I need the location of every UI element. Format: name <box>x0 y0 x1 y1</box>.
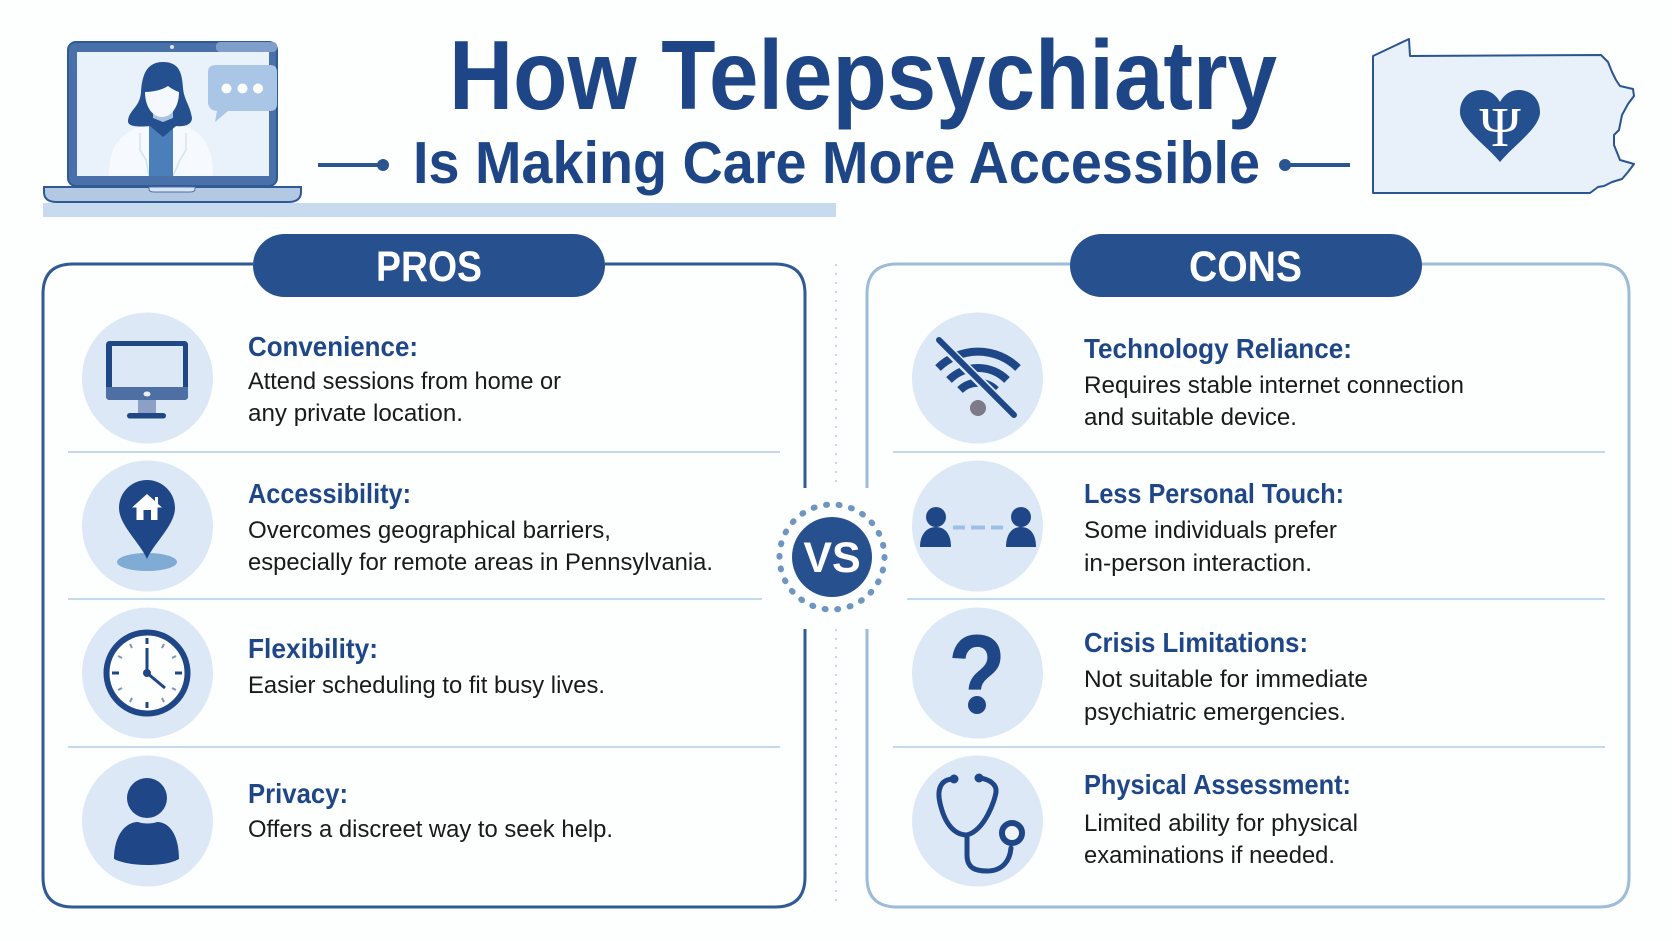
text: crisis limitations <box>1084 627 1368 726</box>
text: crisis limitations: psychiatric emergencies. <box>1084 699 1346 726</box>
text: convenience: any private location. <box>248 400 463 427</box>
icon: question mark: ? <box>948 613 1006 738</box>
pros panel border <box>43 264 805 907</box>
title line 1: How Telepsychiatry <box>449 20 1277 130</box>
header underline bar <box>43 203 836 217</box>
text: less personal touch <box>1084 478 1344 577</box>
text: flexibility: Easier scheduling to fit busy lives. <box>248 672 605 699</box>
text: crisis limitations: Crisis Limitations: <box>1084 627 1308 658</box>
cons heading pill: CONS <box>1189 243 1302 291</box>
title line 2: Is Making Care More Accessible <box>413 130 1260 196</box>
row: less personal touch <box>912 460 1344 592</box>
icon: Pennsylvania map with psi heart <box>1373 39 1634 193</box>
text: technology reliance <box>1084 333 1464 431</box>
cons heading pill <box>1070 234 1422 297</box>
icon: Pennsylvania map with psi heart: Ψ <box>1479 97 1521 159</box>
text: accessibility: Accessibility: <box>248 478 411 509</box>
text: privacy: Offers a discreet way to seek help. <box>248 816 613 843</box>
text: privacy: Privacy: <box>248 778 348 809</box>
text: technology reliance: Requires stable internet connection <box>1084 372 1464 399</box>
row: crisis limitations <box>912 608 1368 738</box>
icon: clock <box>82 608 213 738</box>
text: accessibility <box>248 478 713 576</box>
text: physical assessment: examinations if needed. <box>1084 842 1335 869</box>
text: physical assessment: Limited ability for physical <box>1084 810 1358 837</box>
icon: two distant people <box>912 460 1043 592</box>
text: less personal touch: Some individuals prefer <box>1084 517 1337 544</box>
icon: question mark <box>912 608 1043 738</box>
icon: location pin with house <box>82 460 213 592</box>
row: convenience <box>82 312 561 444</box>
vs badge: VS <box>803 534 861 582</box>
title <box>413 20 1277 196</box>
text: accessibility: especially for remote areas in Pennsylvania. <box>248 549 713 576</box>
pros heading pill: PROS <box>376 243 482 291</box>
icon: person <box>82 756 213 886</box>
panel: pros <box>43 234 805 907</box>
text: technology reliance: Technology Reliance: <box>1084 333 1352 364</box>
decorative title connector right <box>1279 159 1350 171</box>
panel: cons <box>867 234 1629 907</box>
row: physical assessment <box>912 756 1358 886</box>
text: convenience: Convenience: <box>248 331 418 362</box>
text: technology reliance: and suitable device. <box>1084 404 1297 431</box>
text: flexibility: Flexibility: <box>248 633 378 664</box>
icon: desktop monitor <box>82 312 213 444</box>
pros heading pill <box>253 234 605 297</box>
icon: wifi off <box>912 312 1043 444</box>
text: accessibility: Overcomes geographical barriers, <box>248 517 611 544</box>
text: privacy <box>248 778 613 843</box>
text: crisis limitations: Not suitable for immediate <box>1084 666 1368 693</box>
center dotted divider <box>835 264 837 907</box>
decorative title connector left <box>318 159 389 171</box>
illustration: laptop with doctor on video call <box>44 42 301 202</box>
text: less personal touch: in-person interaction. <box>1084 550 1312 577</box>
row: flexibility <box>82 608 605 738</box>
text: physical assessment <box>1084 769 1358 869</box>
icon: stethoscope <box>912 756 1043 886</box>
text: physical assessment: Physical Assessment: <box>1084 769 1351 800</box>
text: flexibility <box>248 633 605 699</box>
text: convenience: Attend sessions from home or <box>248 368 561 395</box>
text: convenience <box>248 331 561 427</box>
row: technology reliance <box>912 312 1464 444</box>
text: less personal touch: Less Personal Touch: <box>1084 478 1344 509</box>
vs badge <box>780 504 884 610</box>
row: privacy <box>82 756 613 886</box>
row: accessibility <box>82 460 713 592</box>
cons panel border <box>867 264 1629 907</box>
